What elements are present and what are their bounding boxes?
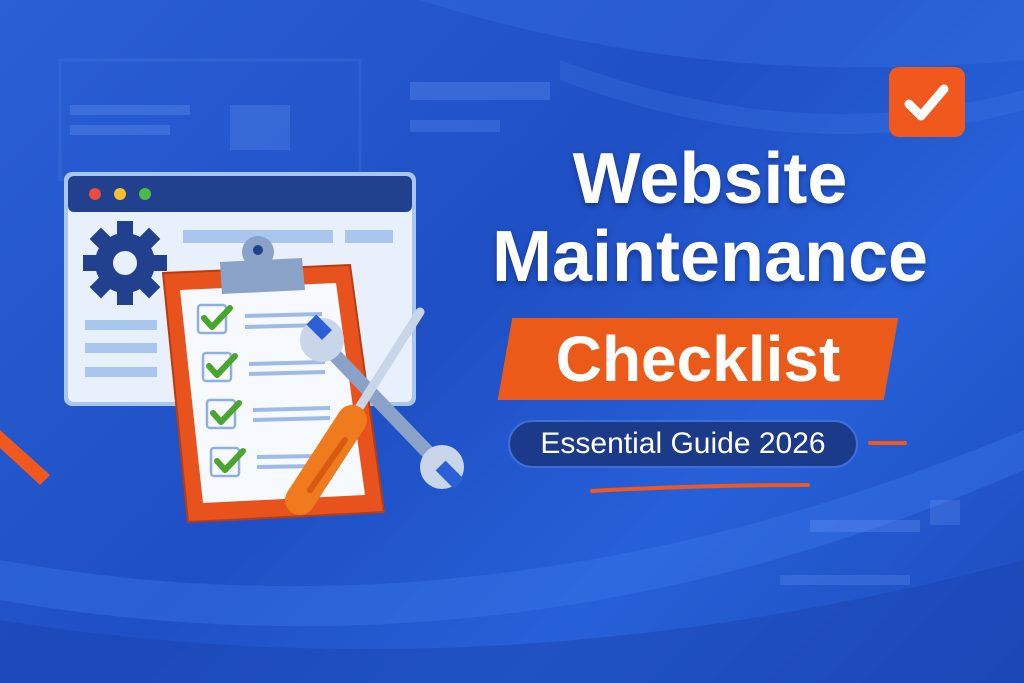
icon: orange checkbox: [889, 67, 965, 137]
title: Website Maintenance: Maintenance: [492, 217, 928, 297]
icon: screwdriver: [300, 312, 420, 500]
icon: gear: [83, 221, 167, 305]
browser window: [64, 172, 416, 406]
subtitle pill: Essential Guide 2026: [540, 427, 826, 460]
illustration: browser, clipboard and tools: [64, 172, 464, 523]
accent lines: [590, 441, 907, 493]
title: Website Maintenance: Website: [573, 139, 847, 219]
banner: Checklist: [498, 318, 898, 400]
title: Website Maintenance: [492, 139, 928, 297]
clipboard: [163, 236, 384, 522]
banner: Checklist: Checklist: [556, 323, 840, 395]
icon: wrench: [300, 315, 464, 489]
subtitle pill: [508, 420, 858, 468]
